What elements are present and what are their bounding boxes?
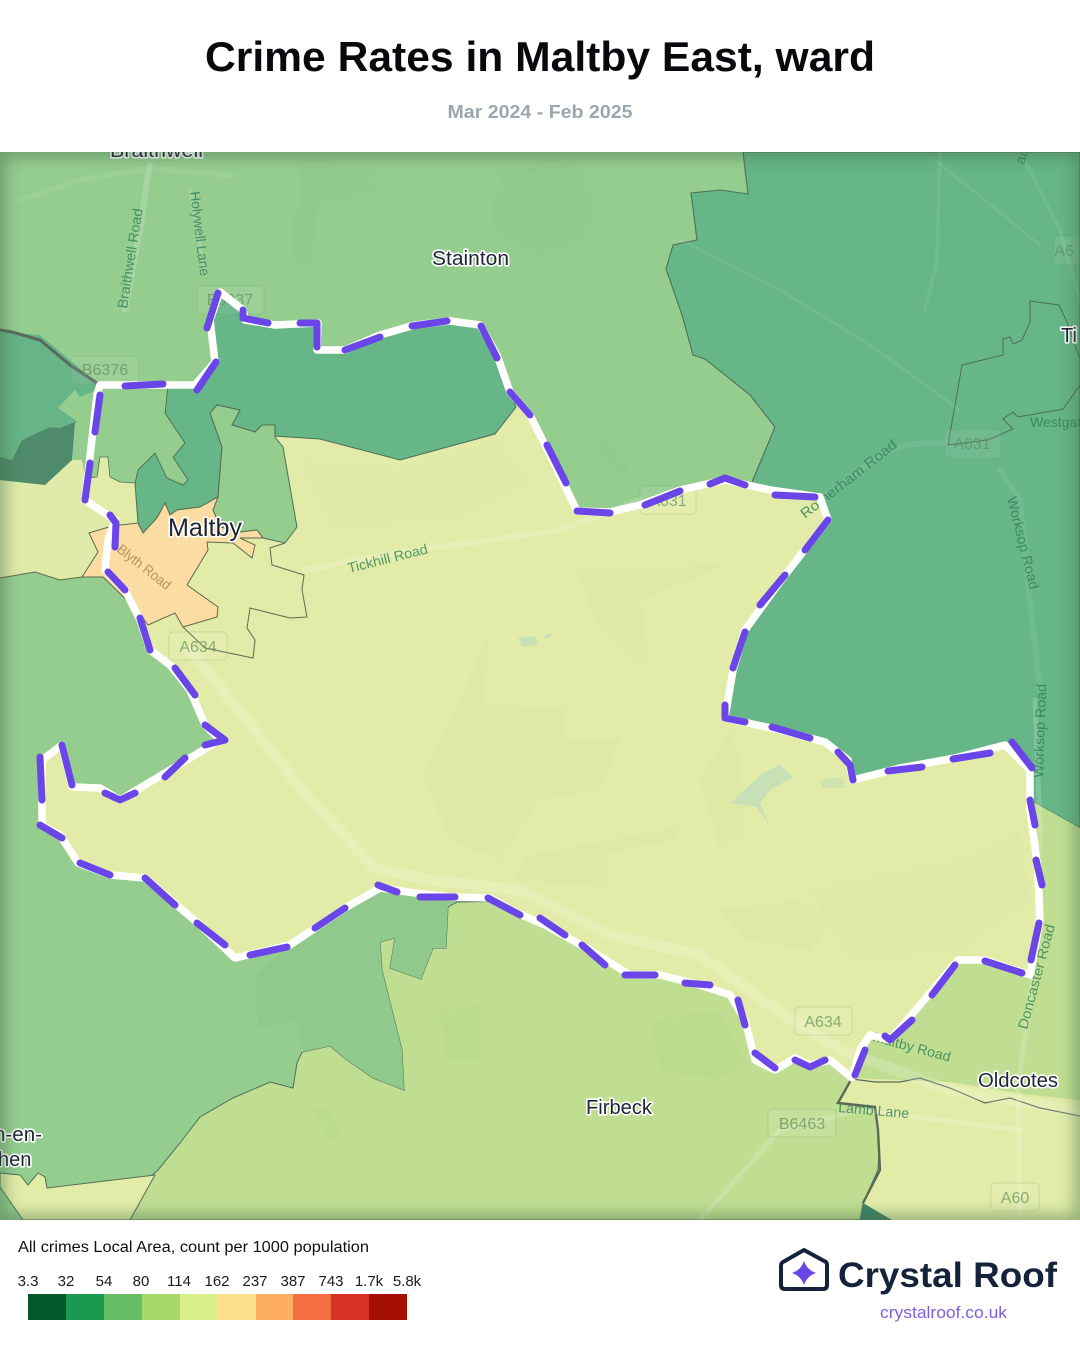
- logo wordmark: Crystal Roof: [838, 1256, 1057, 1295]
- boundary white line: [42, 292, 1040, 1078]
- road shields: A634: [179, 639, 217, 656]
- region: west pale: [0, 460, 111, 580]
- road labels: Worksop Road: [1004, 495, 1043, 591]
- legend value labels: 1.7k: [355, 1273, 384, 1290]
- road labels: ad: [1012, 146, 1032, 166]
- road shields: A634: [804, 1014, 842, 1031]
- place labels: [0, 140, 1077, 1171]
- region: south light green: [130, 900, 880, 1220]
- outline north-east village: [948, 301, 1080, 445]
- region: south-east pale: [838, 1078, 1080, 1220]
- road labels: Doncaster Road: [1014, 922, 1058, 1031]
- logo url: crystalroof.co.uk: [880, 1304, 1008, 1322]
- legend value labels: 5.8k: [393, 1273, 422, 1290]
- legend value labels: [18, 1273, 422, 1290]
- road labels: Maltby Road: [871, 1028, 953, 1065]
- region: northern dark ward area: [135, 292, 516, 533]
- legend value labels: 162: [204, 1273, 230, 1290]
- road labels: Rotherham Road: [797, 436, 900, 521]
- road labels: Tickhill Road: [346, 541, 429, 576]
- legend value labels: 387: [280, 1273, 306, 1290]
- region: bottom-left corner pale: [0, 1173, 155, 1220]
- region: Maltby north-west patch: [85, 385, 188, 485]
- road labels: Holywell Lane: [187, 190, 213, 277]
- road shields: B6376: [82, 362, 128, 379]
- region: Maltby high-crime orange: [82, 497, 263, 627]
- road shields: B6463: [779, 1116, 825, 1133]
- road labels: Worksop Road: [1030, 684, 1049, 778]
- place labels: Firbeck: [586, 1097, 653, 1119]
- water features: [730, 765, 793, 827]
- terrain in ward: [300, 440, 1030, 960]
- road shields: A631: [649, 493, 687, 510]
- legend value labels: 32: [58, 1273, 74, 1290]
- region: south-west darker tone: [302, 906, 448, 1090]
- road labels: Braithwell Road: [114, 207, 146, 309]
- legend value labels: 114: [167, 1273, 191, 1290]
- title: Crime Rates in Maltby East, ward: [205, 33, 875, 80]
- legend value labels: 54: [96, 1273, 112, 1290]
- legend title: All crimes Local Area, count per 1000 population: [18, 1239, 369, 1256]
- outlines south-east of Maltby: [183, 543, 307, 658]
- legend value labels: 3.3: [18, 1273, 38, 1290]
- legend: [18, 1273, 422, 1320]
- place labels: Stainton: [432, 248, 509, 270]
- legend value labels: 237: [242, 1273, 268, 1290]
- terrain north: [290, 165, 630, 475]
- road labels: [114, 146, 1080, 1121]
- road labels: Blyth Road: [114, 541, 174, 593]
- place labels: Maltby: [168, 514, 242, 542]
- subtitle: date range: Mar 2024 - Feb 2025: [448, 102, 632, 122]
- logo: Crystal Roof: [781, 1250, 1057, 1322]
- roads: [125, 165, 1080, 1220]
- map edge vignette: [0, 148, 1080, 1224]
- place labels: Oldcotes: [978, 1070, 1058, 1092]
- terrain south: [312, 1005, 745, 1140]
- region: north-west dark: [0, 332, 100, 460]
- road shields: A631: [953, 436, 991, 453]
- region: patch west of boundary: [58, 390, 94, 474]
- region: east light green strip: [850, 800, 1080, 1100]
- road shields: A6: [1054, 243, 1074, 260]
- legend value labels: 743: [318, 1273, 344, 1290]
- road shields: A60: [1001, 1190, 1029, 1207]
- icon: house with star: [781, 1250, 827, 1289]
- road labels: Lamb Lane: [838, 1099, 910, 1121]
- region: north-west darkest: [0, 422, 75, 485]
- road shields: [71, 236, 1080, 1211]
- boundary purple dashes: [40, 293, 1042, 1075]
- legend colour bar: [28, 1294, 407, 1320]
- region: north-east dark green: [666, 152, 1080, 828]
- place labels: Braithwell: [110, 140, 203, 162]
- region: ward pale yellow-green: [46, 404, 1036, 1072]
- road shields: B6037: [207, 292, 253, 309]
- place labels: Ti: [1061, 325, 1077, 347]
- region: Maltby north-east patch: [210, 405, 297, 543]
- ward boundary: [40, 292, 1042, 1078]
- legend value labels: 80: [133, 1273, 149, 1290]
